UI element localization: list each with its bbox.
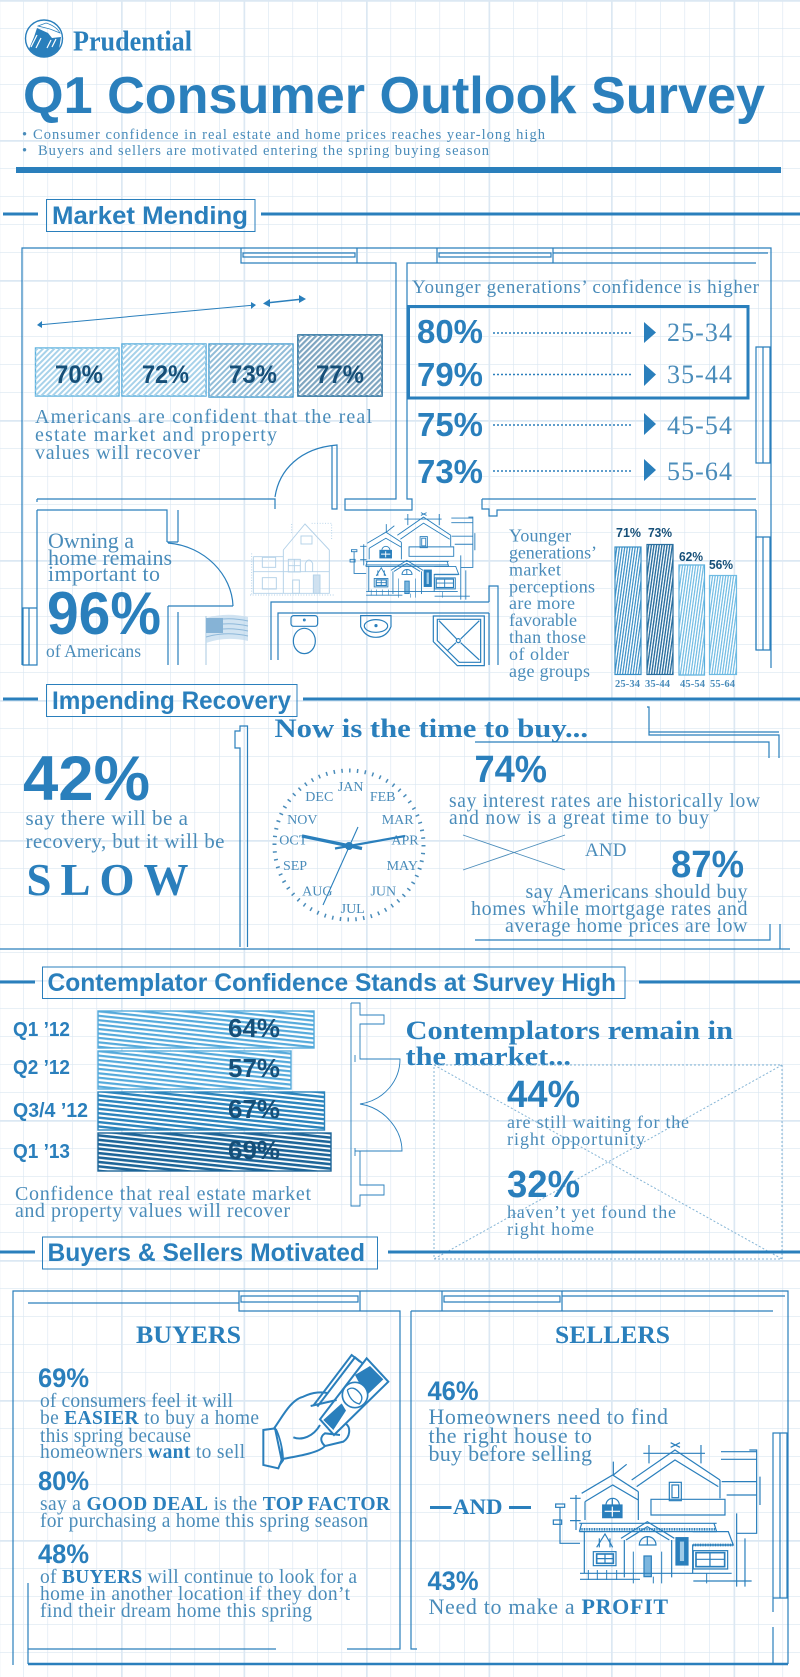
stat: 32 percent bbox=[507, 1164, 676, 1239]
clock chart with months: APR bbox=[391, 834, 419, 848]
bar chart: perceptions by age: 35-44 bbox=[645, 679, 671, 690]
panel: sellers: the right house to bbox=[428, 1423, 592, 1448]
panel: sellers: buy before selling bbox=[428, 1441, 592, 1466]
section heading: Contemplator Confidence: Contemplator Confidence Stands at Survey High bbox=[48, 969, 616, 997]
connector: AND with cross bbox=[463, 835, 626, 870]
text: owning a home 96 percent bbox=[46, 528, 172, 661]
section heading: Buyers and Sellers Motivated: Buyers & Sellers Motivated bbox=[48, 1239, 365, 1267]
text: younger generations' market perceptions: generations’ bbox=[509, 542, 597, 562]
text: younger generations' market perceptions: age groups bbox=[509, 661, 590, 681]
clock chart with months: JUL bbox=[341, 902, 365, 917]
stat: 74 percent: and now is a great time to buy bbox=[449, 808, 709, 829]
section heading: Market Mending: Market Mending bbox=[52, 202, 248, 230]
panel: sellers: Homeowners need to find bbox=[428, 1404, 668, 1429]
text: Americans are confident: values will recover bbox=[35, 442, 200, 464]
text: younger generations' market perceptions: market bbox=[509, 560, 561, 580]
age confidence list: 55-64 bbox=[667, 457, 732, 486]
section heading: Impending Recovery bbox=[3, 684, 800, 716]
text: owning a home 96 percent: home remains bbox=[48, 545, 172, 570]
bar chart: contemplator confidence by quarter: Q2 ’12 bbox=[13, 1057, 70, 1079]
icon: hand holding money bbox=[263, 1355, 388, 1468]
section heading: Buyers and Sellers Motivated bbox=[0, 1237, 800, 1269]
bar chart: confidence 70 to 77 percent: 73% bbox=[229, 361, 277, 389]
clock chart with months: NOV bbox=[287, 813, 317, 828]
panel: buyers: BUYERS bbox=[136, 1322, 241, 1349]
stat: 87 percent: homes while mortgage rates and bbox=[471, 898, 748, 920]
floor plan: market mending walls bbox=[22, 248, 771, 668]
age confidence list: 35-44 bbox=[667, 360, 732, 389]
stat: 42 percent slow recovery: 42% bbox=[23, 744, 150, 814]
bar chart: perceptions by age: 73% bbox=[648, 526, 672, 540]
section heading: Market Mending bbox=[3, 200, 800, 232]
bar chart: contemplator confidence by quarter: 69% bbox=[228, 1135, 280, 1165]
panel: buyers: of BUYERS will continue to look for a bbox=[40, 1567, 357, 1588]
text: younger generations' market perceptions: favorable bbox=[509, 610, 577, 630]
text: owning a home 96 percent: important to bbox=[48, 561, 160, 586]
highlight box around top age groups bbox=[408, 306, 748, 398]
bar chart: perceptions by age: 62% bbox=[679, 550, 703, 564]
panel: sellers: 43% bbox=[428, 1566, 478, 1596]
illustration: house blueprint large bbox=[553, 1443, 760, 1587]
stat: 87 percent: average home prices are low bbox=[505, 915, 748, 937]
clock chart with months: JAN bbox=[338, 780, 364, 795]
clock chart with months bbox=[274, 770, 424, 920]
stat: 42 percent slow recovery: say there will be a bbox=[26, 806, 189, 830]
panel: buyers: find their dream home this spring bbox=[40, 1601, 312, 1622]
text: younger generations' market perceptions: than those bbox=[509, 627, 586, 647]
stat: 74 percent bbox=[449, 749, 760, 829]
text: Americans are confident: Americans are confident that the real bbox=[35, 406, 372, 428]
heading: contemplators remain in the market bbox=[406, 1016, 734, 1071]
floor plan: recovery walls bbox=[0, 707, 790, 949]
heading: contemplators remain in the market: Contemplators remain in bbox=[406, 1016, 734, 1045]
icon: american flag bbox=[206, 615, 248, 665]
age confidence list: 25-34 bbox=[667, 318, 732, 347]
logo: Prudential bbox=[26, 20, 192, 58]
panel: buyers: say a GOOD DEAL is the TOP FACTOR bbox=[40, 1494, 391, 1515]
illustration: faded house sketch bbox=[250, 523, 335, 595]
bar chart: contemplator confidence by quarter: Q1 ’13 bbox=[13, 1141, 70, 1163]
text: younger generations' market perceptions: perceptions bbox=[509, 576, 595, 596]
subtitle bullets: • bbox=[22, 143, 27, 159]
panel: buyers: of consumers feel it will bbox=[40, 1391, 234, 1412]
panel: buyers bbox=[38, 1322, 391, 1622]
panel: buyers: 48% bbox=[38, 1539, 89, 1569]
section heading: Contemplator Confidence bbox=[0, 967, 800, 998]
text: owning a home 96 percent: 96% bbox=[47, 580, 161, 647]
floor plan: buyers and sellers walls bbox=[13, 1291, 788, 1665]
text: confidence caption bbox=[15, 1183, 311, 1222]
text: owning a home 96 percent: Owning a bbox=[48, 528, 134, 553]
stat: 42 percent slow recovery bbox=[23, 744, 224, 905]
stat: 32 percent: 32% bbox=[507, 1164, 580, 1206]
clock chart with months: AUG bbox=[302, 884, 332, 900]
panel: buyers: 80% bbox=[38, 1466, 89, 1496]
text: younger generations' market perceptions: are more bbox=[509, 593, 575, 613]
bar chart: perceptions by age: 25-34 bbox=[615, 679, 641, 690]
panel: sellers: AND bbox=[453, 1494, 502, 1519]
bar chart: contemplator confidence by quarter: Q1 ’12 bbox=[13, 1019, 70, 1041]
text: owning a home 96 percent: of Americans bbox=[46, 641, 141, 661]
panel: sellers: SELLERS bbox=[555, 1322, 670, 1349]
stat: 74 percent: say interest rates are historically low bbox=[449, 791, 760, 812]
dashed placeholder box bbox=[434, 1065, 782, 1259]
age confidence list: 73% bbox=[417, 453, 483, 490]
icons: toilet, sink and shower bbox=[291, 616, 484, 666]
bar chart: contemplator confidence by quarter bbox=[13, 1011, 331, 1171]
floor plan: double door wall bbox=[351, 1003, 402, 1206]
panel: buyers: home in another location if they don’t bbox=[40, 1584, 351, 1605]
bar chart: confidence 70 to 77 percent bbox=[36, 335, 382, 397]
stat: 44 percent: are still waiting for the bbox=[507, 1112, 689, 1132]
stat: 44 percent: right opportunity bbox=[507, 1129, 645, 1149]
panel: buyers: 69% bbox=[38, 1363, 89, 1393]
bar chart: confidence 70 to 77 percent: 70% bbox=[55, 361, 103, 389]
bar chart: contemplator confidence by quarter: 57% bbox=[228, 1053, 280, 1083]
clock chart with months: FEB bbox=[370, 790, 396, 805]
illustration: house blueprint bbox=[350, 513, 475, 600]
heading: contemplators remain in the market: the market... bbox=[406, 1042, 571, 1071]
clock chart with months: OCT bbox=[279, 834, 308, 848]
bar chart: perceptions by age bbox=[615, 526, 736, 690]
panel: buyers: this spring because bbox=[40, 1426, 191, 1447]
stat: 32 percent: haven’t yet found the bbox=[507, 1202, 676, 1222]
panel: buyers: be EASIER to buy a home bbox=[40, 1408, 259, 1429]
bar chart: perceptions by age: 56% bbox=[709, 558, 733, 572]
bar chart: confidence 70 to 77 percent: 77% bbox=[316, 361, 364, 389]
age confidence list: 45-54 bbox=[667, 411, 732, 440]
bar chart: contemplator confidence by quarter: 67% bbox=[228, 1094, 280, 1124]
text: younger generations' market perceptions: Younger bbox=[509, 526, 571, 546]
stat: 87 percent bbox=[471, 844, 748, 937]
bar chart: perceptions by age: 71% bbox=[616, 526, 641, 540]
age confidence list: 75% bbox=[417, 406, 483, 443]
text: Americans are confident: estate market and property bbox=[35, 424, 277, 446]
text: confidence caption: and property values will recover bbox=[15, 1200, 290, 1222]
bar chart: contemplator confidence by quarter: Q3/4 ’12 bbox=[13, 1100, 88, 1122]
subtitle bullets: Consumer confidence in real estate and home prices reaches year-long high bbox=[33, 127, 546, 143]
panel: sellers: Need to make a PROFIT bbox=[428, 1594, 668, 1619]
bar chart: contemplator confidence by quarter: 64% bbox=[228, 1013, 280, 1043]
text: Americans are confident bbox=[35, 406, 372, 464]
stat: 74 percent: 74% bbox=[474, 749, 547, 791]
logo: Prudential: Prudential bbox=[73, 26, 192, 58]
panel: buyers: for purchasing a home this spring season bbox=[40, 1511, 368, 1532]
text: younger generations' market perceptions bbox=[509, 526, 597, 681]
subtitle bullets bbox=[22, 127, 546, 159]
stat: 87 percent: 87% bbox=[671, 844, 744, 886]
stat: 32 percent: right home bbox=[507, 1219, 594, 1239]
header rule bbox=[16, 167, 781, 173]
text: confidence caption: Confidence that real estate market bbox=[15, 1183, 311, 1205]
clock chart with months: JUN bbox=[370, 884, 396, 900]
stat: 44 percent bbox=[507, 1074, 689, 1149]
title: Q1 Consumer Outlook Survey bbox=[23, 67, 765, 125]
panel: buyers: homeowners want to sell bbox=[40, 1442, 246, 1463]
stat: 42 percent slow recovery: SLOW bbox=[26, 855, 188, 905]
arrows above bars bbox=[37, 295, 306, 328]
clock chart with months: MAR bbox=[382, 813, 414, 828]
stat: 42 percent slow recovery: recovery, but it will be bbox=[26, 829, 224, 853]
subtitle bullets: • bbox=[22, 127, 27, 143]
bar chart: perceptions by age: 55-64 bbox=[710, 679, 736, 690]
text: younger generations heading: Younger generations’ confidence is higher bbox=[412, 277, 760, 298]
clock chart with months: SEP bbox=[283, 859, 307, 874]
heading: now is the time to buy: Now is the time to buy... bbox=[274, 714, 588, 743]
stat: 87 percent: say Americans should buy bbox=[526, 881, 748, 903]
bar chart: perceptions by age: 45-54 bbox=[680, 679, 706, 690]
panel: sellers: 46% bbox=[428, 1376, 478, 1406]
clock chart with months: DEC bbox=[305, 790, 333, 805]
age confidence list bbox=[417, 313, 732, 490]
text: younger generations' market perceptions: of older bbox=[509, 644, 569, 664]
clock chart with months: MAY bbox=[387, 859, 418, 874]
subtitle bullets: Buyers and sellers are motivated entering the spring buying season bbox=[38, 143, 490, 159]
age confidence list: 80% bbox=[417, 313, 483, 350]
connector: AND with cross: AND bbox=[585, 840, 626, 861]
panel: sellers bbox=[428, 1322, 670, 1619]
bar chart: confidence 70 to 77 percent: 72% bbox=[142, 361, 189, 389]
age confidence list: 79% bbox=[417, 356, 483, 393]
section heading: Impending Recovery: Impending Recovery bbox=[52, 687, 291, 715]
stat: 44 percent: 44% bbox=[507, 1074, 580, 1116]
